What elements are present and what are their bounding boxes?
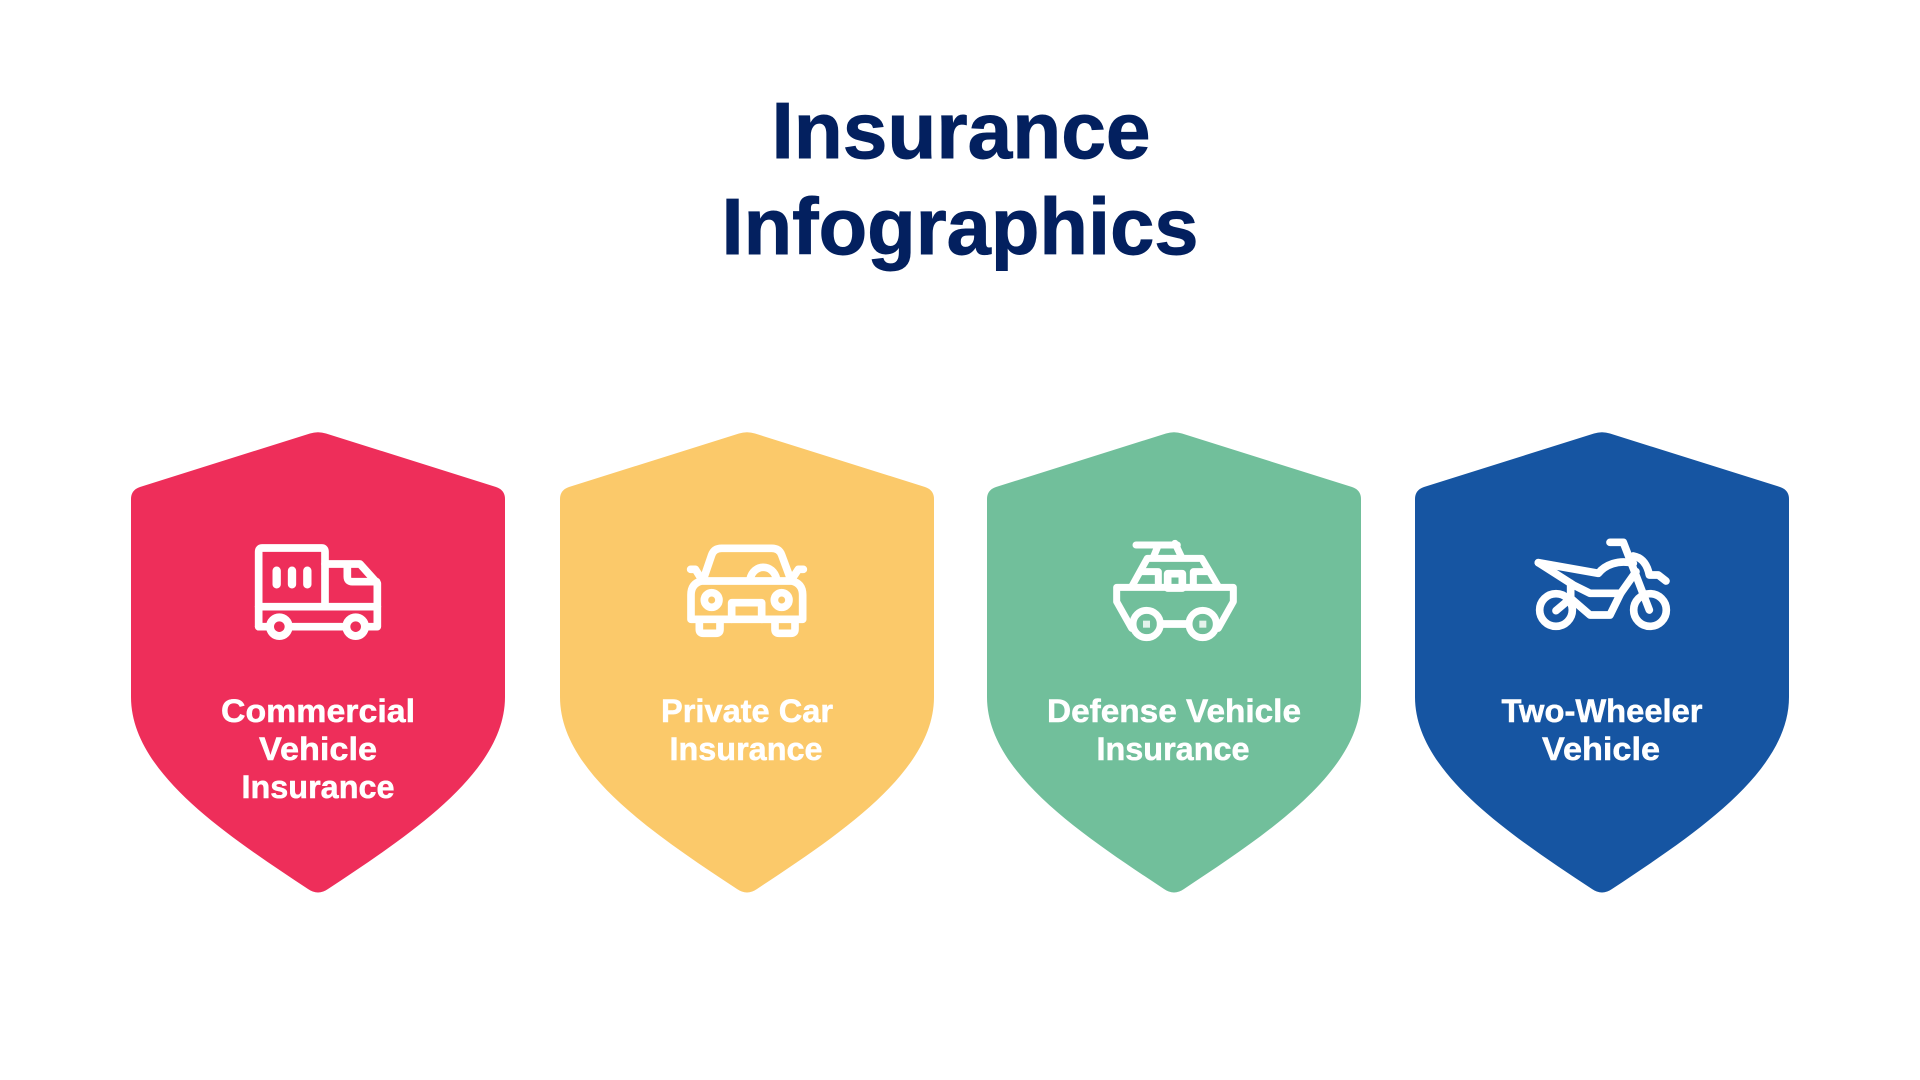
label: defense vehicle insurance: Insurance <box>1096 731 1250 767</box>
label: private car insurance: Insurance <box>670 731 822 767</box>
title <box>722 86 1198 271</box>
label: defense vehicle insurance: Defense Vehicle <box>1047 693 1301 729</box>
title: Insurance <box>772 86 1150 175</box>
icon: motorcycle <box>1538 542 1666 626</box>
shield: yellow <box>560 432 934 892</box>
label: two-wheeler vehicle: Two-Wheeler <box>1502 693 1702 729</box>
panel: two-wheeler vehicle <box>1415 432 1789 892</box>
icon: truck <box>259 548 377 636</box>
label: private car insurance <box>661 693 833 767</box>
shield: red <box>131 432 505 892</box>
panel: defense vehicle insurance <box>987 432 1361 892</box>
label: commercial vehicle insurance <box>221 693 415 805</box>
label: commercial vehicle insurance: Commercial <box>221 693 415 729</box>
icon: car <box>691 548 803 633</box>
label: private car insurance: Private Car <box>661 693 833 729</box>
shield: green <box>987 432 1361 892</box>
panel: private car insurance <box>560 432 934 892</box>
shield: blue <box>1415 432 1789 892</box>
title: Infographics <box>722 182 1198 271</box>
panel: commercial vehicle insurance <box>131 432 505 892</box>
label: defense vehicle insurance <box>1047 693 1301 767</box>
label: two-wheeler vehicle <box>1502 693 1702 767</box>
icon: defense vehicle <box>1117 543 1233 638</box>
label: commercial vehicle insurance: Insurance <box>242 769 394 805</box>
label: two-wheeler vehicle: Vehicle <box>1542 731 1660 767</box>
label: commercial vehicle insurance: Vehicle <box>259 731 377 767</box>
